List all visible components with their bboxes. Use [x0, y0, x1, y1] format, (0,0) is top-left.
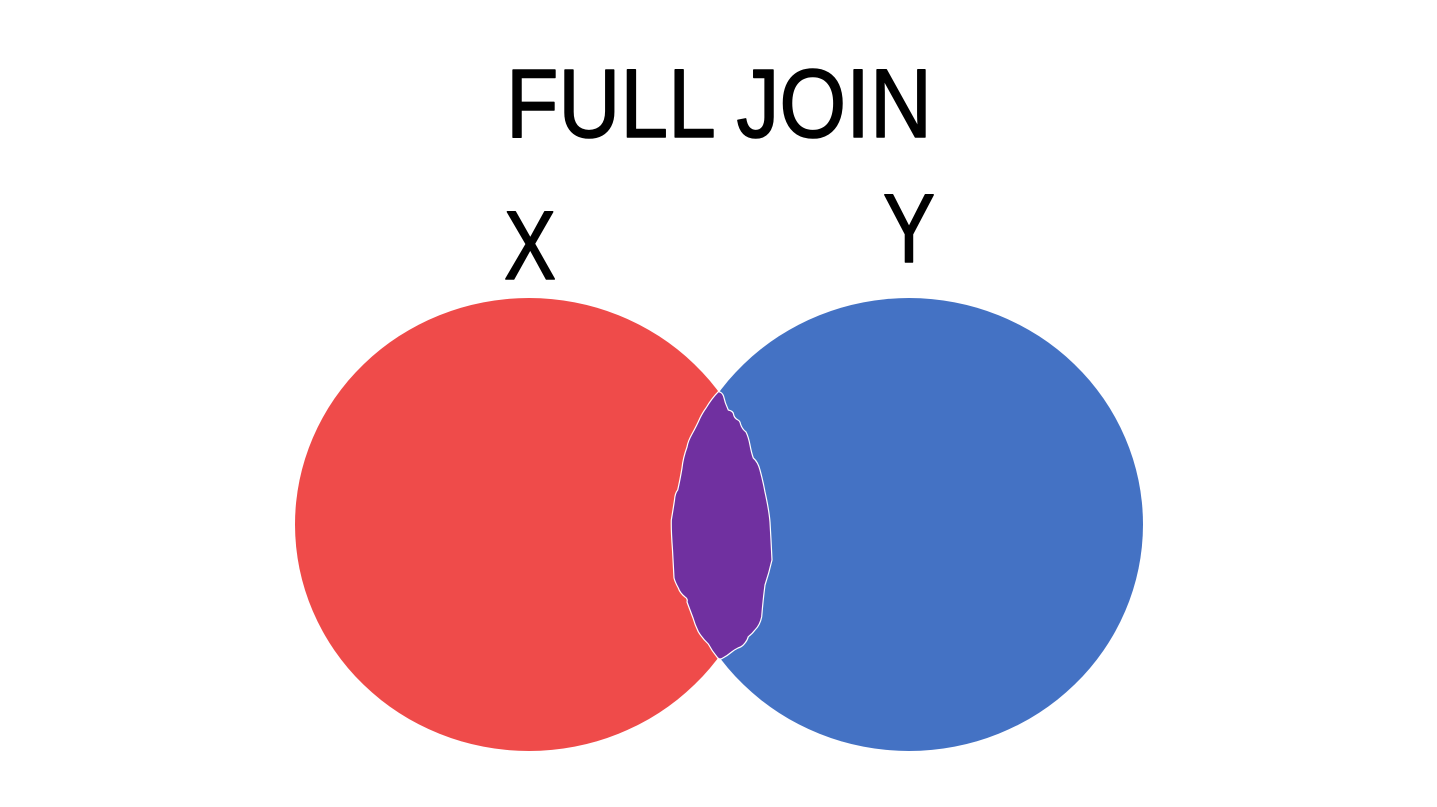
overlap: intersection of X and Y: [671, 392, 772, 659]
title: FULL JOIN: [506, 49, 932, 158]
circle: Y set: [675, 298, 1143, 751]
label: Y: Y: [883, 174, 935, 283]
label: X: X: [504, 191, 556, 300]
circle: X set: [295, 298, 763, 751]
